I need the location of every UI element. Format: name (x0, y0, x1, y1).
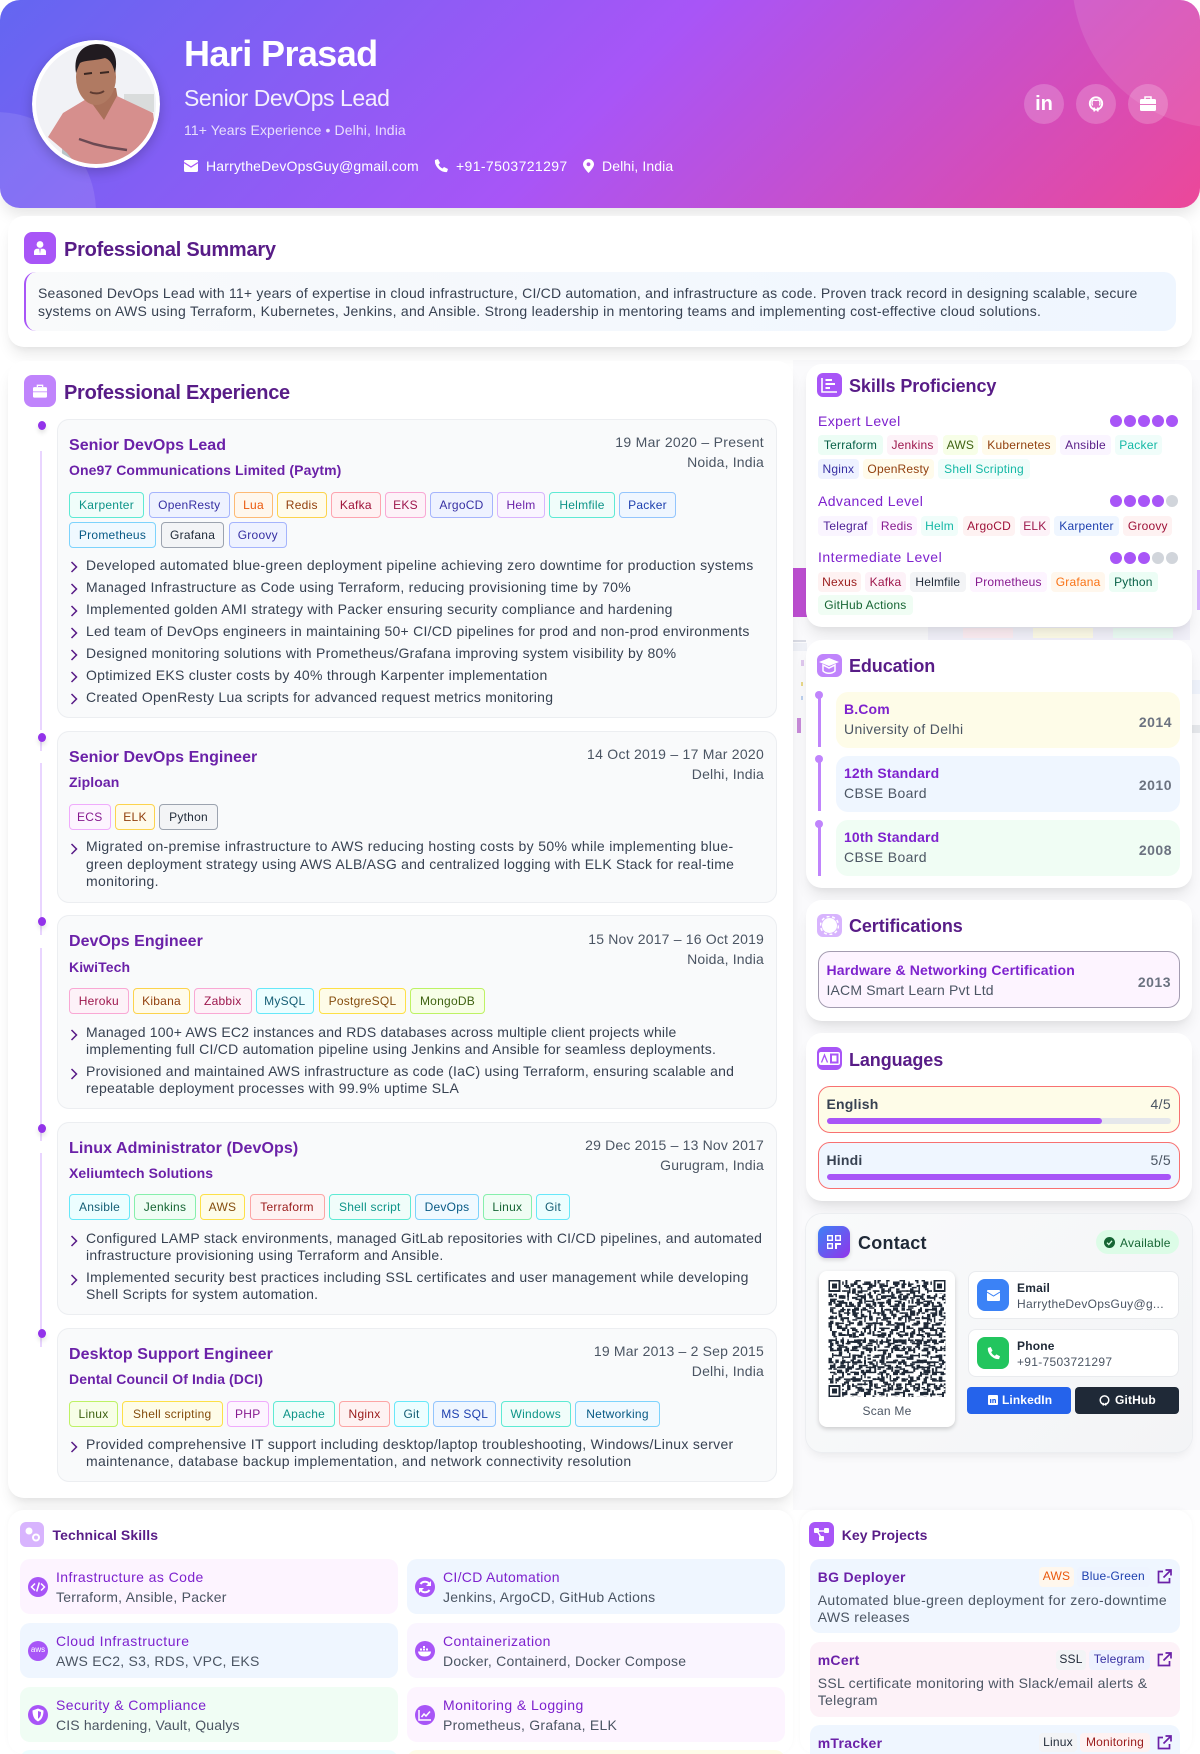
level dots (1110, 415, 1178, 427)
location: Noida, India (687, 951, 764, 967)
skill tags: AWS (947, 438, 974, 452)
skill row four, cropped (20, 1750, 398, 1754)
advanced level (818, 493, 1178, 536)
skill tags: Nexus (822, 575, 857, 589)
icon: certificate (817, 914, 842, 937)
skill tags (818, 435, 1162, 479)
name: Hari Prasad (184, 33, 378, 74)
tech tags: MS SQL (441, 1407, 488, 1421)
job: devops engineer (57, 915, 777, 1109)
achievements: Implemented security best practices including SSL certificates and user management while developing (86, 1269, 749, 1285)
panel: technical skills (8, 1510, 793, 1754)
icon: list (817, 373, 842, 397)
project: bg deployer: AWS releases (818, 1608, 910, 1624)
expert level (818, 413, 1178, 479)
degree: 10th standard: CBSE Board (844, 849, 927, 865)
achievements: Developed automated blue-green deployment pipeline achieving zero downtime for production systems (86, 557, 754, 573)
experience line: 11+ Years Experience • Delhi, India (184, 122, 406, 138)
dates: 19 Mar 2020 – Present (615, 434, 764, 450)
location: Delhi, India (602, 158, 673, 174)
role title: Senior DevOps Lead (69, 437, 226, 454)
tech tags: Python (169, 810, 208, 824)
skill tags: GitHub Actions (824, 598, 906, 612)
skill: ci/cd automation (407, 1559, 785, 1614)
heading: Technical Skills (52, 1527, 158, 1543)
heading: Certifications (849, 916, 963, 936)
degree: 12th standard (836, 756, 1180, 812)
skill tags: Terraform (824, 438, 877, 452)
skill tags: Shell Scripting (944, 462, 1024, 476)
project: bg deployer (810, 1559, 1180, 1633)
icon: envelope (184, 160, 198, 172)
skill tags: Kubernetes (987, 438, 1051, 452)
achievements: implementing full CI/CD automation pipeline using Jenkins and Ansible for seamless deployments. (86, 1041, 716, 1057)
level label: Intermediate Level (818, 549, 942, 565)
job: desktop support engineer (57, 1328, 777, 1482)
project: bg deployer: BG Deployer (818, 1569, 906, 1585)
level label: Expert Level (818, 413, 901, 429)
degree: 10th standard: 10th Standard (844, 829, 939, 845)
tech tags: Git (403, 1407, 420, 1421)
availability badge (1096, 1230, 1179, 1254)
skill: infrastructure as code (20, 1559, 398, 1614)
achievements: repeatable deployment processes with 99.9% uptime SLA (86, 1080, 459, 1096)
level label: Advanced Level (818, 493, 923, 509)
achievements: Migrated on-premise infrastructure to AWS reducing hosting costs by 50% while implementing blue- (86, 838, 733, 854)
job: senior devops lead (57, 419, 777, 718)
icon: location pin (583, 159, 594, 173)
level dots (1110, 552, 1178, 564)
tech tags: DevOps (425, 1200, 469, 1214)
skill tags: Redis (881, 518, 913, 532)
email entry: HarrytheDevOpsGuy@g... (1017, 1297, 1164, 1311)
background ghost layer (793, 360, 1200, 1510)
tech tags: Groovy (238, 528, 278, 542)
achievements (71, 1024, 734, 1096)
project: mtracker: Monitoring (1086, 1735, 1144, 1749)
project: mcert: SSL (1059, 1652, 1083, 1666)
role title: DevOps Engineer (69, 933, 203, 950)
degree: 12th standard: 12th Standard (844, 765, 939, 781)
button: github (1075, 1386, 1179, 1414)
qr code card (819, 1271, 955, 1426)
achievements: green deployment strategy using AWS ALB/ASG and centralized logging with ELK Stack for real-time (86, 856, 734, 872)
panel: key projects (800, 1510, 1192, 1754)
achievements: Led team of DevOps engineers in maintaining 50+ CI/CD pipelines for prod and non-prod environments (86, 623, 750, 639)
tech tags: EKS (393, 498, 418, 512)
skill tags: Nginx (822, 462, 854, 476)
tech tags: Prometheus (79, 528, 146, 542)
skill tags: ELK (1023, 518, 1046, 532)
timeline (815, 691, 823, 876)
panel: contact (806, 1214, 1192, 1452)
role title: Desktop Support Engineer (69, 1346, 273, 1362)
project: mcert (810, 1642, 1180, 1717)
achievements: monitoring. (86, 873, 159, 889)
skill tags: Groovy (1128, 518, 1168, 532)
tech tags: Heroku (79, 994, 119, 1008)
icon: qr (818, 1226, 850, 1258)
language: english (818, 1086, 1180, 1132)
skill: containerization: Docker, Containerd, Docker Compose (443, 1653, 686, 1669)
job title: Senior DevOps Lead (184, 85, 389, 111)
social icon: linkedin: in (1035, 93, 1053, 115)
tech tags (69, 988, 485, 1014)
skill tags: ArgoCD (967, 518, 1011, 532)
project: mtracker (810, 1725, 1180, 1754)
timeline (38, 421, 46, 1347)
phone number: +91-7503721297 (456, 158, 568, 174)
project: mtracker: mTracker (818, 1735, 882, 1751)
role title: Senior DevOps Engineer (69, 748, 257, 766)
company: Dental Council Of India (DCI) (69, 1370, 263, 1386)
summary text: systems on AWS using Terraform, Kubernetes, Jenkins, and Ansible. Strong leadership in mentoring teams and implementing cost-effective cloud solutions. (38, 303, 1041, 319)
icon: phone (434, 159, 448, 172)
skill: security: CIS hardening, Vault, Qualys (56, 1717, 240, 1733)
tech tags: Windows (511, 1407, 561, 1421)
email entry: Email (1017, 1281, 1050, 1295)
skill: cloud infrastructure: aws (31, 1645, 45, 1654)
skill: infrastructure as code: Terraform, Ansible, Packer (56, 1589, 227, 1605)
tech tags: Jenkins (144, 1200, 186, 1214)
achievements (71, 838, 734, 889)
degree: 10th standard: 2008 (1139, 842, 1172, 858)
heading: Skills Proficiency (849, 376, 996, 396)
icon: user tie (24, 232, 56, 264)
skill tags: Jenkins (891, 438, 934, 452)
tech tags: Packer (628, 498, 667, 512)
tech tags: Shell script (339, 1200, 401, 1214)
language: hindi (818, 1142, 1180, 1188)
skill: ci/cd automation: CI/CD Automation (443, 1569, 560, 1585)
role title: Linux Administrator (DevOps) (69, 1140, 298, 1157)
achievements: Designed monitoring solutions with Prometheus/Grafana improving system visibility by 80% (86, 645, 676, 661)
tech tags: Karpenter (79, 498, 134, 512)
degree: 12th standard: 2010 (1139, 777, 1172, 793)
achievements: Provided comprehensive IT support including desktop/laptop troubleshooting, Windows/Linux server (86, 1436, 734, 1452)
skill: cloud infrastructure (20, 1623, 398, 1678)
skill: cloud infrastructure: AWS EC2, S3, RDS, VPC, EKS (56, 1653, 260, 1669)
tech tags (69, 1194, 570, 1220)
dates: 14 Oct 2019 – 17 Mar 2020 (587, 746, 764, 762)
phone entry: Phone (1017, 1339, 1055, 1353)
skill: containerization (407, 1623, 785, 1678)
certificate entry: Hardware & Networking Certification (826, 962, 1075, 978)
skill tags: Kafka (870, 575, 901, 589)
achievements: Implemented golden AMI strategy with Packer ensuring security compliance and hardening (86, 601, 673, 617)
panel: languages (806, 1033, 1192, 1201)
project: bg deployer: Automated blue-green deployment for zero-downtime (818, 1592, 1167, 1608)
panel: skills proficiency (806, 364, 1192, 627)
tech tags: ArgoCD (439, 498, 484, 512)
skill tags: Helm (925, 518, 954, 532)
tech tags: Linux (79, 1407, 108, 1421)
project: mcert: Telegram (818, 1692, 878, 1708)
certificate entry: IACM Smart Learn Pvt Ltd (826, 982, 994, 998)
tech tags: Zabbix (204, 994, 242, 1008)
location: Delhi, India (692, 766, 764, 782)
tech tags: Grafana (170, 528, 215, 542)
company: Ziploan (69, 774, 119, 790)
contact row (184, 158, 674, 174)
tech tags: Helm (506, 498, 536, 512)
location: Delhi, India (692, 1363, 764, 1379)
tech tags (69, 1401, 660, 1427)
tech tags: Shell scripting (133, 1407, 211, 1421)
tech tags: PHP (235, 1407, 260, 1421)
achievements: Optimized EKS cluster costs by 40% through Karpenter implementation (86, 667, 548, 683)
dates: 19 Mar 2013 – 2 Sep 2015 (594, 1343, 764, 1359)
tech tags (69, 804, 218, 830)
caption: Scan Me (862, 1404, 912, 1418)
company: KiwiTech (69, 959, 130, 975)
skill: containerization: Containerization (443, 1633, 551, 1649)
achievements: Created OpenResty Lua scripts for advanced request metrics monitoring (86, 689, 553, 705)
email entry (968, 1271, 1179, 1319)
icon: language (817, 1047, 842, 1070)
panel: professional summary (8, 216, 1192, 347)
language: hindi: 5/5 (1150, 1152, 1171, 1168)
achievements: infrastructure provisioning using Terraform and Ansible. (86, 1247, 444, 1263)
project: mcert: SSL certificate monitoring with Slack/email alerts & (818, 1674, 1147, 1690)
achievements (71, 1230, 762, 1302)
tech tags: Linux (492, 1200, 522, 1214)
skill: ci/cd automation: Jenkins, ArgoCD, GitHub Actions (443, 1589, 655, 1605)
panel: education (806, 640, 1192, 888)
summary text block (24, 272, 1176, 331)
skill: monitoring (407, 1687, 785, 1742)
skill tags (818, 572, 1158, 615)
phone entry: +91-7503721297 (1017, 1355, 1112, 1369)
tech tags: Kibana (142, 994, 181, 1008)
tech tags: ELK (123, 810, 147, 824)
tech tags: MongoDB (420, 994, 475, 1008)
qr code (828, 1280, 946, 1397)
summary text: Seasoned DevOps Lead with 11+ years of expertise in cloud infrastructure, CI/CD automation, and infrastructure as code. Proven track record in designing scalable, secure (38, 285, 1138, 301)
dates: 15 Nov 2017 – 16 Oct 2019 (588, 931, 764, 947)
header banner (0, 0, 1200, 208)
achievements (71, 557, 754, 705)
degree: b.com: 2014 (1139, 714, 1172, 730)
skill: security: Security & Compliance (56, 1697, 206, 1713)
email: HarrytheDevOpsGuy@gmail.com (206, 158, 419, 174)
achievements: Configured LAMP stack environments, managed GitLab repositories with CI/CD pipelines, and automated (86, 1230, 762, 1246)
skill: infrastructure as code: Infrastructure as Code (56, 1569, 204, 1585)
degree: 12th standard: CBSE Board (844, 785, 927, 801)
degree: b.com: B.Com (844, 701, 890, 717)
tech tags: OpenResty (158, 498, 220, 512)
achievements: Managed Infrastructure as Code using Terraform, reducing provisioning time by 70% (86, 579, 631, 595)
level dots (1110, 495, 1178, 507)
skill row four, cropped (407, 1750, 785, 1754)
tech tags: ECS (77, 810, 102, 824)
project: mcert: mCert (818, 1652, 860, 1668)
certificate entry: 2013 (1138, 974, 1171, 990)
button: linkedin: LinkedIn (1002, 1393, 1052, 1407)
skill tags: Prometheus (975, 575, 1042, 589)
tech tags: MySQL (264, 994, 305, 1008)
tech tags: Nginx (349, 1407, 380, 1421)
achievements: Shell Scripts for system automation. (86, 1286, 318, 1302)
tech tags: AWS (209, 1200, 236, 1214)
job: linux administrator (57, 1122, 777, 1315)
social icon: linkedin (1024, 84, 1064, 124)
skill: monitoring: Prometheus, Grafana, ELK (443, 1717, 617, 1733)
language: hindi: Hindi (826, 1152, 862, 1168)
company: One97 Communications Limited (Paytm) (69, 462, 341, 478)
skill tags: Ansible (1065, 438, 1106, 452)
tech tags: Helmfile (559, 498, 605, 512)
icon: project diagram (809, 1522, 834, 1547)
language: english: 4/5 (1150, 1096, 1171, 1112)
certificate entry (818, 951, 1180, 1008)
summary text (38, 285, 1138, 319)
skill tags: Telegraf (823, 518, 867, 532)
project: bg deployer: AWS (1043, 1569, 1070, 1583)
tech tags: Redis (286, 498, 318, 512)
heading: Professional Experience (64, 382, 290, 404)
degree: 10th standard (836, 820, 1180, 876)
skill tags: OpenResty (867, 462, 929, 476)
job: senior devops engineer (57, 731, 777, 903)
availability badge: Available (1120, 1236, 1171, 1250)
panel: professional experience (8, 361, 793, 1498)
heading: Key Projects (842, 1527, 927, 1543)
skill: monitoring: Monitoring & Logging (443, 1697, 584, 1713)
heading: Contact (858, 1232, 927, 1252)
social icon: github (1076, 84, 1116, 124)
profile photo (32, 40, 160, 168)
tech tags: PostgreSQL (329, 994, 396, 1008)
skill: cloud infrastructure: Cloud Infrastructure (56, 1633, 190, 1649)
project: mcert: Telegram (1094, 1652, 1145, 1666)
skill tags (818, 516, 1172, 536)
tech tags: Terraform (260, 1200, 314, 1214)
skill tags: Python (1114, 575, 1153, 589)
achievements: maintenance, database backup implementation, and network connectivity resolution (86, 1452, 632, 1468)
button: github: GitHub (1115, 1393, 1156, 1407)
skill tags: Grafana (1056, 575, 1101, 589)
heading: Languages (849, 1050, 943, 1070)
tech tags: Lua (243, 498, 264, 512)
panel: certifications (806, 900, 1192, 1021)
tech tags: Networking (586, 1407, 649, 1421)
tech tags: Git (545, 1200, 561, 1214)
achievements (71, 1436, 734, 1469)
tech tags: Ansible (79, 1200, 120, 1214)
project: bg deployer: Blue-Green (1082, 1569, 1145, 1583)
degree: b.com (836, 692, 1180, 748)
tech tags: Kafka (340, 498, 372, 512)
icon: email (977, 1279, 1009, 1311)
location: Gurugram, India (660, 1157, 764, 1173)
degree: b.com: University of Delhi (844, 721, 963, 737)
company: Xeliumtech Solutions (69, 1165, 213, 1181)
skill: security (20, 1687, 398, 1742)
icon: cogs (20, 1522, 44, 1547)
achievements: Managed 100+ AWS EC2 instances and RDS databases across multiple client projects while (86, 1024, 677, 1040)
tech tags (69, 492, 676, 548)
icon: graduation cap (817, 654, 842, 677)
button: linkedin (967, 1386, 1071, 1414)
icon: phone (977, 1337, 1009, 1369)
intermediate level (818, 549, 1178, 615)
language: english: English (826, 1096, 878, 1112)
achievements: Provisioned and maintained AWS infrastructure as code (IaC) using Terraform, ensuring scalable and (86, 1063, 734, 1079)
tech tags: Apache (283, 1407, 325, 1421)
project: mtracker: Linux (1043, 1735, 1073, 1749)
icon: briefcase (24, 375, 56, 407)
social icon: portfolio (1128, 84, 1168, 124)
skill tags: Packer (1119, 438, 1158, 452)
dates: 29 Dec 2015 – 13 Nov 2017 (585, 1137, 764, 1153)
heading: Education (849, 656, 935, 676)
skill tags: Karpenter (1059, 518, 1114, 532)
heading: Professional Summary (64, 239, 276, 261)
phone entry (968, 1329, 1179, 1377)
skill tags: Helmfile (915, 575, 960, 589)
location: Noida, India (687, 454, 764, 470)
